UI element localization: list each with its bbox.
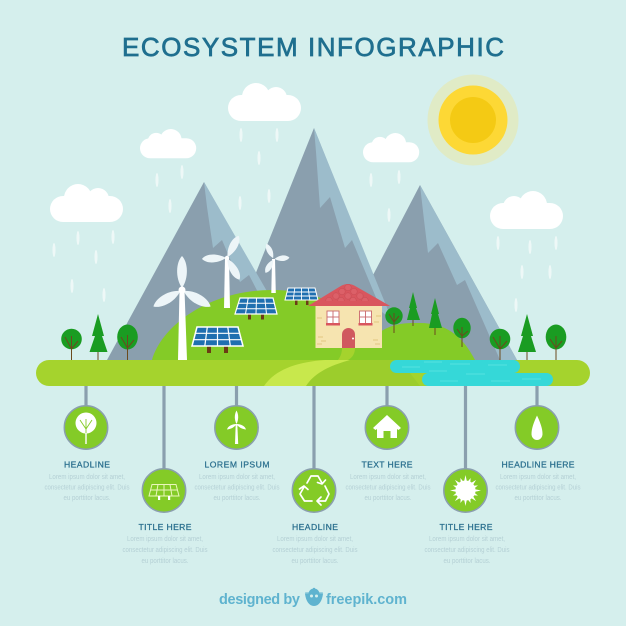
- solar panel: middle: [235, 298, 277, 320]
- lake: [390, 360, 553, 386]
- icon: water drop: [515, 406, 559, 449]
- text block: text here: TEXT HERE: [362, 460, 413, 470]
- text block: title here 1: [122, 522, 208, 565]
- text block: headline here: Lorem ipsum dolor sit amet,: [500, 474, 576, 481]
- mountain: right: [360, 185, 517, 360]
- icon: sun: [444, 469, 487, 512]
- text block: title here 2: Lorem ipsum dolor sit amet,: [429, 536, 505, 543]
- text block: title here 1: Lorem ipsum dolor sit amet,: [127, 536, 203, 543]
- mountain: centre: [245, 128, 407, 360]
- icon: freepik logo: [305, 588, 323, 606]
- connector lines: [86, 386, 537, 469]
- windows: [326, 311, 372, 326]
- footer credit: freepik.com: [326, 592, 407, 608]
- text block: title here 2: [424, 522, 510, 565]
- mountain: left: [107, 182, 300, 360]
- text block: title here 2: TITLE HERE: [440, 522, 493, 532]
- text block: title here 2: consectetur adipiscing elit. Duis: [424, 547, 510, 554]
- solar panel: back: [285, 288, 318, 305]
- text block: headline 1: consectetur adipiscing elit. Duis: [44, 484, 130, 492]
- text block: headline 1: Lorem ipsum dolor sit amet,: [49, 474, 125, 481]
- text block: headline 2: eu porttitor lacus.: [292, 558, 339, 565]
- text block: headline here: eu porttitor lacus.: [514, 495, 562, 502]
- text block: headline here: consectetur adipiscing elit. Duis: [496, 484, 581, 492]
- text block: text here: [346, 460, 431, 502]
- text block: headline 2: HEADLINE: [292, 522, 338, 532]
- text block: headline 1: [44, 460, 130, 502]
- text block: headline here: HEADLINE HERE: [502, 460, 575, 470]
- text block: headline 2: consectetur adipiscing elit. Duis: [272, 547, 358, 554]
- trees: [61, 292, 566, 360]
- wind turbine: medium: [202, 234, 243, 308]
- icon: recycle: [292, 469, 336, 512]
- footer credit: [219, 588, 407, 608]
- hills: [152, 290, 475, 360]
- wind turbine: small: [263, 242, 290, 293]
- text block: lorem ipsum: LOREM IPSUM: [204, 460, 270, 470]
- text block: text here: consectetur adipiscing elit. Duis: [346, 484, 431, 492]
- solar panel: front: [192, 327, 243, 353]
- icon: tree: [64, 406, 108, 449]
- text block: headline here: [496, 460, 581, 502]
- text block: headline 1: HEADLINE: [64, 460, 110, 470]
- door: [342, 328, 355, 348]
- house: [308, 284, 390, 348]
- text block: lorem ipsum: Lorem ipsum dolor sit amet,: [199, 474, 275, 481]
- icon: solar panel: [142, 469, 186, 512]
- icon: wind turbine: [215, 406, 258, 449]
- text block: headline 2: [272, 522, 358, 565]
- text block: title here 1: TITLE HERE: [138, 522, 192, 532]
- title: ECOSYSTEM INFOGRAPHIC: [122, 32, 504, 62]
- text block: title here 1: consectetur adipiscing elit. Duis: [122, 547, 208, 554]
- sun: [428, 74, 518, 166]
- icon: house: [365, 406, 409, 449]
- text block: lorem ipsum: [194, 460, 280, 502]
- rain drops: [52, 128, 558, 312]
- clouds: [50, 83, 563, 229]
- wind turbine: large: [151, 256, 213, 360]
- text block: text here: eu porttitor lacus.: [364, 495, 412, 502]
- footer credit: designed by: [219, 592, 300, 608]
- roof: [308, 284, 390, 306]
- text block: lorem ipsum: consectetur adipiscing elit. Duis: [194, 484, 280, 492]
- text block: lorem ipsum: eu porttitor lacus.: [214, 495, 261, 502]
- ground bar: [36, 348, 590, 386]
- text block: text here: Lorem ipsum dolor sit amet,: [350, 474, 426, 481]
- text block: title here 1: eu porttitor lacus.: [142, 558, 189, 565]
- text block: headline 2: Lorem ipsum dolor sit amet,: [277, 536, 353, 543]
- text block: title here 2: eu porttitor lacus.: [444, 558, 491, 565]
- text block: headline 1: eu porttitor lacus.: [64, 495, 111, 502]
